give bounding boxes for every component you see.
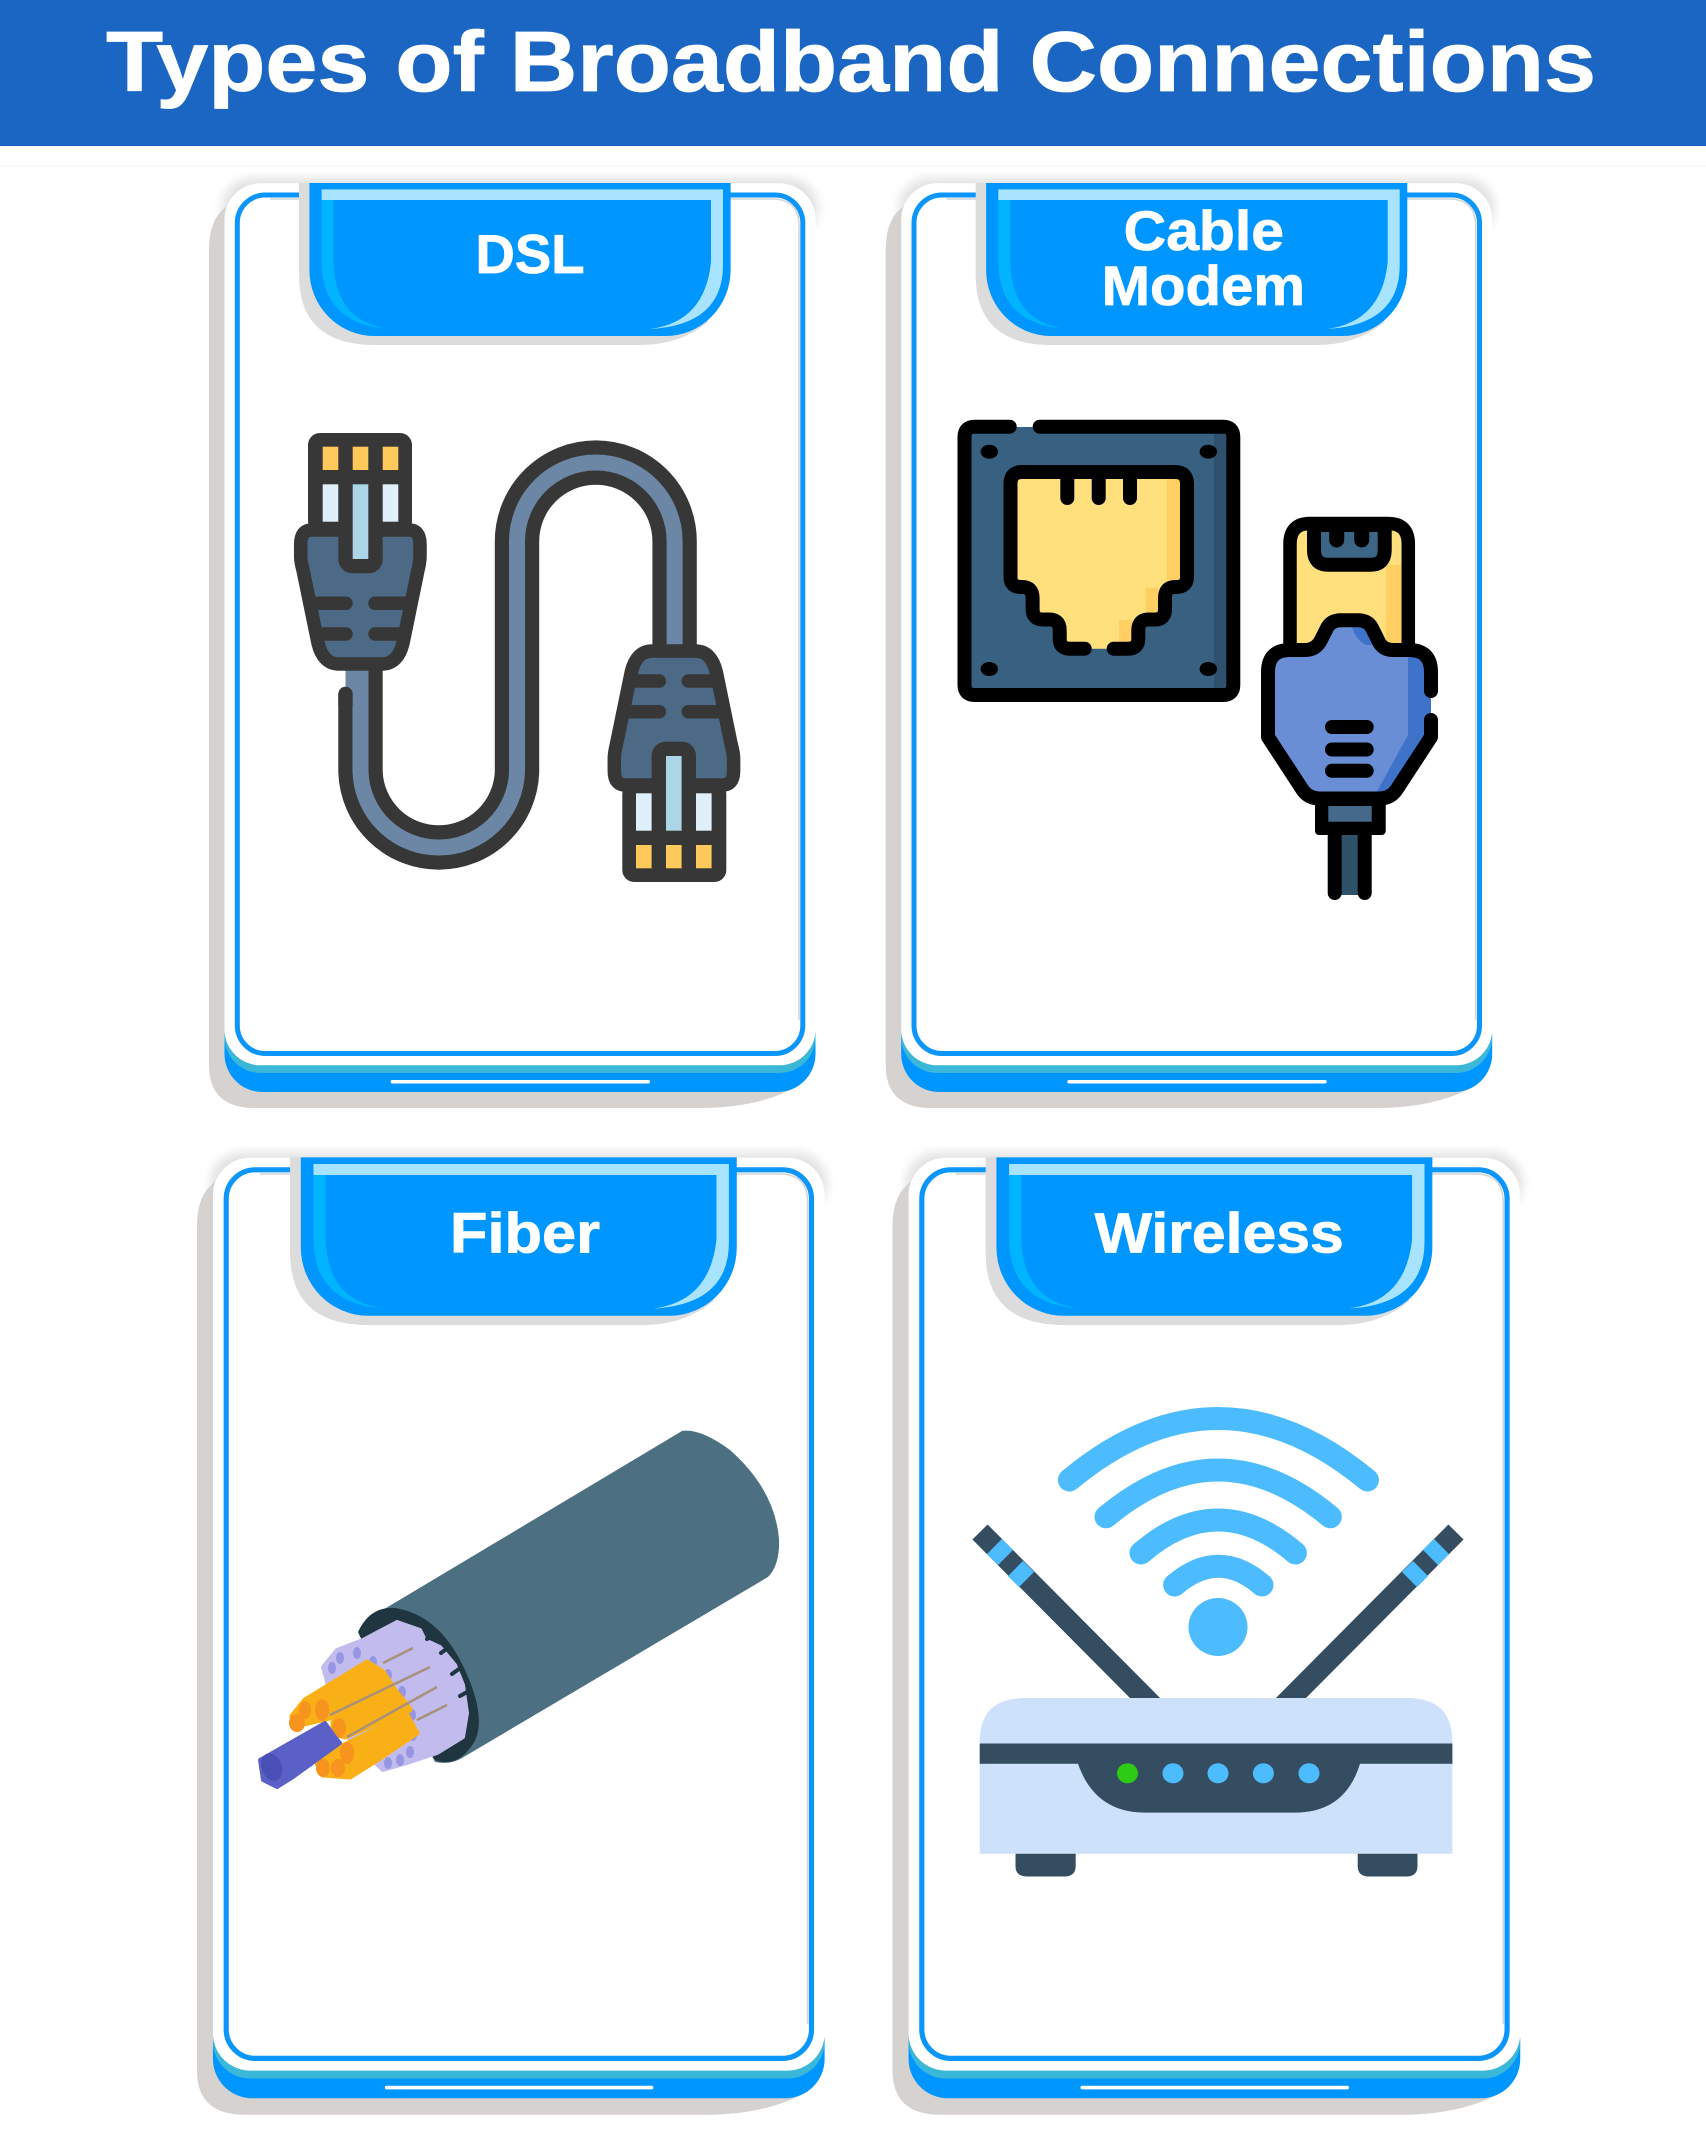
orange strands — [292, 1662, 417, 1777]
label tab: Fiber: Fiber — [450, 1202, 600, 1266]
panel: Wireless — [893, 1152, 1523, 2115]
label tab: Cable Modem — [976, 183, 1407, 345]
icon: wifi router — [980, 1418, 1456, 1876]
cable opening — [358, 1608, 479, 1762]
label tab: Fiber — [290, 1157, 737, 1325]
label tab: Wireless — [986, 1157, 1432, 1325]
icon: RJ45 plug — [1268, 524, 1431, 895]
router feet — [1016, 1854, 1418, 1876]
label tab: Wireless: Wireless — [1095, 1202, 1344, 1266]
label tab: DSL: DSL — [476, 223, 584, 285]
label tab: Cable Modem: Modem — [1102, 254, 1305, 317]
card frame: DSL — [209, 178, 818, 1108]
label tab: Cable Modem: Cable — [1124, 199, 1284, 262]
strand divider lines — [330, 1648, 447, 1737]
cable — [336, 463, 675, 848]
left plug — [301, 433, 420, 664]
wifi signal — [1069, 1418, 1367, 1585]
icon: ethernet cable — [301, 433, 734, 882]
antennas — [980, 1532, 1456, 1708]
icon: fiber optic cable — [258, 1431, 779, 1787]
card frame: Fiber — [197, 1152, 827, 2115]
label tab: DSL — [299, 183, 731, 345]
title banner — [0, 0, 1706, 146]
card frame: Cable Modem — [886, 178, 1495, 1108]
panel: DSL — [209, 178, 818, 1108]
lavender strands — [323, 1622, 467, 1770]
icon: wall jack — [964, 427, 1233, 695]
central core — [260, 1723, 340, 1787]
cable jacket — [366, 1431, 779, 1763]
card frame: Wireless — [893, 1152, 1523, 2115]
panel: Fiber — [197, 1152, 827, 2115]
status lights — [1117, 1763, 1320, 1783]
title: Types of Broadband Connections — [106, 15, 1596, 110]
router body — [980, 1698, 1452, 1854]
panel: Cable Modem — [886, 178, 1495, 1108]
right plug — [614, 651, 734, 882]
